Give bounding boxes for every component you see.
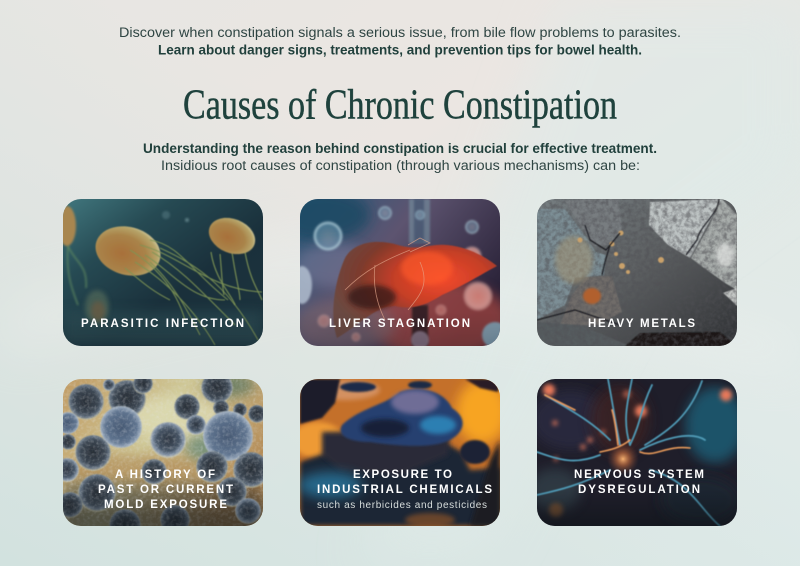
label: such as herbicides and pesticides [317, 500, 487, 511]
label: MOLD EXPOSURE [104, 499, 227, 511]
label [98, 469, 233, 511]
rust texture overlay [537, 199, 737, 346]
icon: large parasite body [94, 226, 162, 276]
label: INDUSTRIAL CHEMICALS [317, 484, 492, 496]
icon: small parasite body [208, 217, 256, 255]
panel: industrial chemicals [292, 379, 508, 527]
label: EXPOSURE TO [353, 469, 452, 481]
subheading text: Understanding the reason behind constipation is crucial for effective treatment. [143, 141, 657, 156]
panel: nervous system dysregulation [529, 379, 745, 526]
intro text [119, 25, 681, 58]
icon: neuron [537, 379, 720, 526]
lower dark fluid [300, 440, 500, 526]
title: Causes of Chronic Constipation [183, 82, 617, 128]
intro text: Learn about danger signs, treatments, and prevention tips for bowel health. [158, 42, 642, 58]
label: PAST OR CURRENT [98, 484, 233, 496]
fluid blue mass [341, 389, 463, 446]
icon: viruses [292, 206, 508, 348]
icon: mold spores [63, 379, 263, 526]
subheading text: Insidious root causes of constipation (through various mechanisms) can be: [161, 158, 640, 173]
icon: glowing bokeh lights [543, 384, 732, 517]
label: DYSREGULATION [578, 484, 700, 496]
icon: liver [333, 242, 497, 338]
label: A HISTORY OF [115, 469, 215, 481]
label [317, 469, 492, 511]
panel: liver stagnation [300, 199, 500, 346]
peeling paint flakes [537, 199, 737, 346]
icon: parasite tentacles [125, 240, 262, 345]
label: NERVOUS SYSTEM [574, 469, 704, 481]
panel: heavy metals [537, 199, 737, 346]
intro text: Discover when constipation signals a serious issue, from bile flow problems to parasites. [119, 25, 681, 40]
subheading text [143, 141, 657, 173]
label: PARASITIC INFECTION [81, 318, 244, 330]
label [574, 469, 704, 496]
panel: mold exposure [63, 379, 263, 526]
label: LIVER STAGNATION [329, 318, 470, 330]
panel: parasitic infection [58, 199, 263, 346]
label: HEAVY METALS [588, 318, 695, 330]
